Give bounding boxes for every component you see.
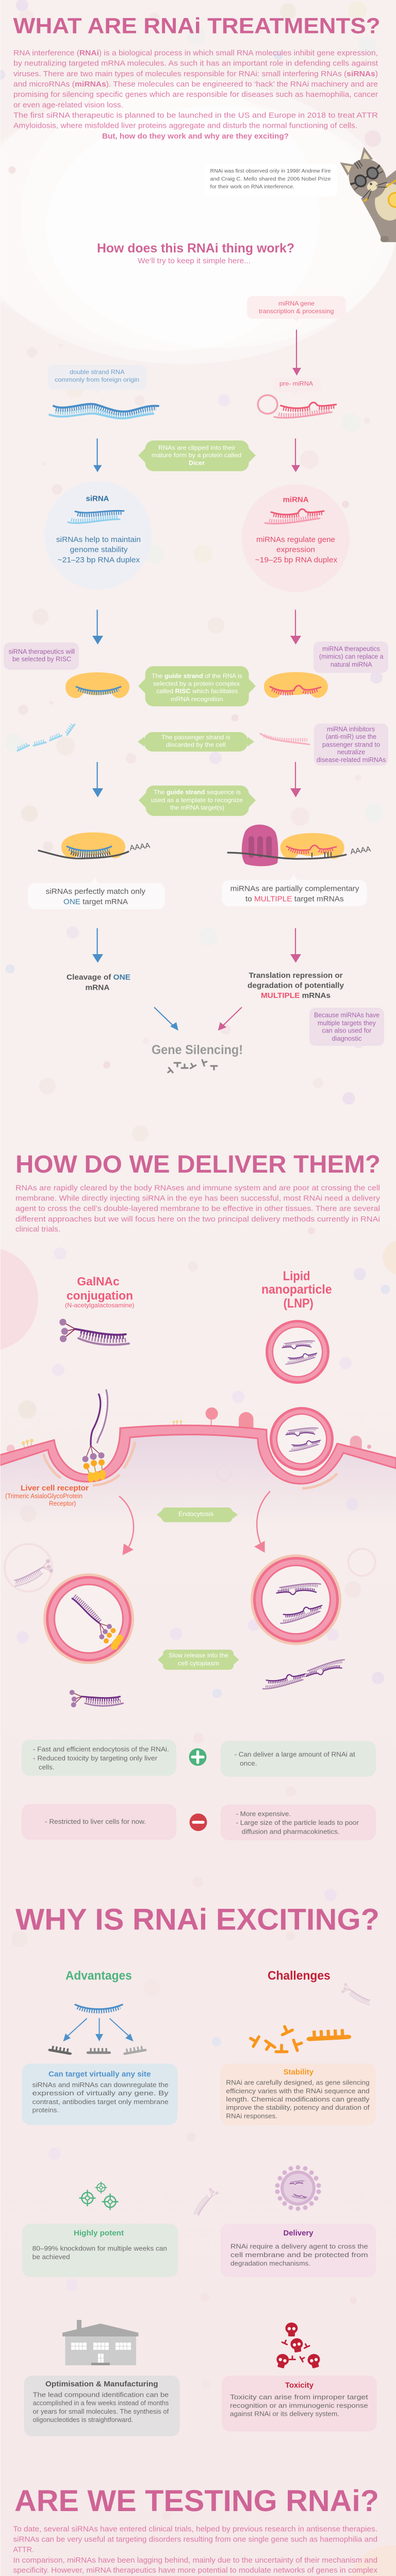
callout: first observed: for their work on RNA interference. [210,184,294,190]
panel: miRNA: ~19–25 bp RNA duplex [255,555,338,564]
panel: LNP cons [221,1804,376,1840]
callout: first observed [205,164,337,197]
bubble: miRNA gene: miRNA gene [278,300,315,307]
heading: lipid nanoparticle [261,1269,332,1311]
icon: delivery particle [275,2165,321,2211]
icon: released GalNAc siRNA [70,1690,123,1707]
text: cleavage of one mRNA [67,974,130,992]
heading: lipid nanoparticle: Lipid [283,1269,310,1283]
panel: can target any site: expression of virtually any gene. By [32,2090,169,2097]
callout: slow release: cell cytoplasm [178,1660,219,1667]
bubble: miRNA gene: transcription & processing [259,308,334,315]
intro paragraph: by neutralizing targeted mRNA molecules. As such it has an important role in defending cells against [13,59,378,68]
delivery paragraph: agent to cross the cell’s double-layered membrane to be effective in other tissues. There are several [15,1205,380,1213]
bubble: miRNAs match MULTIPLE [222,875,367,906]
note: miRNA diagnostics [309,1008,384,1046]
delivery paragraph: clinical trials. [15,1225,60,1234]
panel: miRNA: expression [276,545,315,554]
callout: passenger strand: The passenger strand is [161,734,230,741]
panel: delivery: RNAi require a delivery agent to cross the [230,2243,368,2250]
arrow: gene to pre-miRNA [292,330,301,376]
bubble: pre-miRNA [273,378,321,396]
heading: advantages: Advantages [65,1969,132,1983]
arrow: miRNA clip [291,438,300,472]
title: what are RNAi treatments: WHAT ARE RNAi TREATMENTS? [13,13,381,38]
heading: lipid nanoparticle: nanoparticle [261,1282,332,1297]
panel: GalNAc pros [22,1740,176,1776]
note: miRNA diagnostics: diagnostic [332,1035,361,1042]
decorative faded strand [340,1982,373,2007]
panel: can target any site: Can target virtually any site [48,2070,151,2078]
icon: factory [62,2320,138,2365]
icon: GalNAc siRNA [57,1318,131,1349]
heading: how does this work: How does this RNAi thing work? [97,241,294,256]
panel: delivery: degradation mechanisms. [230,2260,310,2267]
arrow: GalNAc endocytosis [119,1496,134,1555]
label: liver cell receptor [5,1484,89,1507]
heading: GalNAc conjugation: GalNAc [77,1275,120,1288]
callout: guide strand template: used as a template to recognize [151,796,243,804]
panel: optimisation and manufacturing: oligonucleotides is straightforward. [33,2416,133,2424]
arrow: siRNA to RISC [92,610,103,645]
panel: LNP pros: - Can deliver a large amount of RNAi at [234,1751,355,1758]
icon: released LNP RNAs [261,1659,346,1689]
decorative big cells [0,1238,396,1351]
text: translation repression: degradation of potentially [248,982,344,990]
panel: can target any site: proteins. [32,2107,59,2114]
bubble: miRNAs match MULTIPLE: miRNAs are partially complementary [230,884,359,893]
callout: Dicer: Dicer [189,459,205,466]
panel: siRNA: siRNAs help to maintain [56,535,141,544]
panel: GalNAc cons: - Restricted to liver cells for now. [45,1818,146,1825]
bubble: double strand RNA: double strand RNA [70,368,125,376]
title: how do we deliver them: HOW DO WE DELIVER THEM? [15,1151,381,1178]
panel: toxicity: against RNAi or its delivery system. [230,2410,339,2417]
panel: stability [221,2064,376,2125]
panel: optimisation and manufacturing: The lead compound identification can be [33,2391,169,2398]
panel: LNP pros [221,1741,376,1777]
panel: highly potent: Highly potent [74,2229,124,2238]
callout: guide strand RISC: mRNA recognition [171,696,223,703]
callout: Dicer [138,440,256,471]
arrow: LNP endocytosis [254,1491,270,1553]
label: liver cell receptor: Receptor) [49,1500,76,1507]
note: miRNA therapeutics: (mimics) can replace a [319,653,384,660]
intro paragraph: The first siRNA therapeutic is planned to be launched in the US and Europe in 2018 to treat ATTR [13,111,378,120]
cell interior shading [0,1434,396,1525]
title: are we testing RNAi: ARE WE TESTING RNAi? [14,2484,379,2518]
note: siRNA therapeutics: be selected by RISC [12,655,71,663]
icon: RISC with miRNA guide [264,672,328,698]
panel: GalNAc pros: cells. [39,1764,54,1771]
decorative orange blobs [0,2545,396,2576]
panel: stability: efficiency varies with the RNAi sequence and [226,2088,370,2095]
text: translation repression [248,972,344,1000]
arrow: siRNA clip [93,438,102,472]
panel: stability: RNAi responses. [226,2112,277,2120]
heading: how does this work [97,241,294,265]
panel: siRNA: ~21–23 bp RNA duplex [58,555,140,564]
callout: guide strand RISC [138,666,256,706]
arrow: pink to gene silencing [218,1007,242,1030]
testing paragraph: In comparison, miRNAs have been lagging behind, mainly due to the uncertainty of their mechanism and [13,2556,377,2565]
bubble: siRNAs match ONE: siRNAs perfectly match only [46,887,146,896]
panel: LNP cons: diffusion and pharmacokinetics. [242,1828,340,1835]
callout: guide strand template [139,786,256,816]
icon: minus [190,1814,207,1831]
panel: toxicity: recognition or an immunogenic response [230,2402,368,2409]
callout: first observed: and Craig C. Mello shared the 2006 Nobel Prize [210,176,331,182]
bubble: siRNAs match ONE: ONE target mRNA [63,897,128,906]
label: liver cell receptor: Liver cell receptor [21,1484,89,1493]
callout: Dicer: RNAs are clipped into their [158,444,236,451]
delivery paragraph: different approaches but we will focus here on the two principal delivery methods currently in RNAi [15,1215,380,1224]
note: miRNA inhibitors: passenger strand to [322,741,380,749]
icon: cat with Nobel medal [337,145,396,242]
icon: long double strand RNA [50,404,158,418]
icon: miRNA bound to target mRNA with ribosome: AAAA [350,845,371,856]
callout: guide strand RISC: The guide strand of the RNA is [152,672,242,680]
note: siRNA therapeutics: siRNA therapeutics will [9,648,75,655]
arrow: siRNA to target [92,762,103,798]
testing paragraph: siRNAs can be very useful at targeting disorders resulting from one single gene such as haemophilia and [13,2535,377,2544]
delivery paragraph: membrane. While directly injecting siRNA in the eye has been successful, most RNAi need a delivery [15,1194,381,1202]
panel: LNP pros: once. [240,1760,257,1767]
note: miRNA inhibitors: disease-related miRNAs [317,756,386,764]
callout: guide strand template: the mRNA target(s) [170,804,224,811]
heading: challenges: Challenges [268,1969,331,1983]
bubble: miRNAs match MULTIPLE: to MULTIPLE target mRNAs [245,894,344,903]
panel: delivery: cell membrane and be protected from [230,2251,368,2259]
icon: miRNA bound to target mRNA with ribosome [228,824,371,866]
panel: LNP cons: - Large size of the particle leads to poor [236,1819,359,1826]
icon: endosome with LNP RNAs [251,1554,341,1645]
panel: stability: Stability [284,2067,314,2076]
text: translation repression: Translation repression or [249,972,343,980]
note: miRNA diagnostics: Because miRNAs have [314,1012,380,1019]
heading: lipid nanoparticle: (LNP) [284,1296,314,1311]
bubble: pre-miRNA: pre- miRNA [279,380,313,387]
note: miRNA inhibitors: (anti-miR) use the [326,733,376,740]
text: cleavage of one mRNA: mRNA [86,984,110,992]
arrow: to translation repression [290,928,301,963]
panel: delivery: Delivery [284,2229,314,2238]
note: miRNA therapeutics: natural miRNA [331,661,372,668]
icon: skulls [275,2323,322,2369]
note: miRNA therapeutics: miRNA therapeutics [322,646,380,653]
panel: highly potent: 80–99% knockdown for multiple weeks can [32,2245,167,2252]
panel: can target any site [22,2064,177,2125]
bubble: double strand RNA [48,365,147,394]
note: siRNA therapeutics [4,642,79,670]
heading: GalNAc conjugation: conjugation [67,1289,133,1302]
panel: optimisation and manufacturing: Optimisation & Manufacturing [45,2380,158,2388]
testing paragraph [13,2524,377,2576]
callout: endocytosis [157,1507,238,1522]
icon: target crosshairs [79,2181,119,2210]
panel: toxicity: Toxicity can arise from improper target [230,2394,368,2401]
panel: stability: improve the stability, potency and duration of [226,2104,370,2111]
panel: optimisation and manufacturing [24,2376,180,2436]
callout: passenger strand: discarded by the cell [166,741,225,749]
arrow: miRNA to RISC [290,610,301,645]
icon: orange degraded strand [248,2024,348,2053]
icon: RISC with siRNA guide [65,672,129,698]
callout: passenger strand [138,732,254,752]
panel: GalNAc pros: - Fast and efficient endocytosis of the RNAi. [33,1746,169,1753]
note: miRNA diagnostics: can also used for [322,1027,371,1035]
intro paragraph [13,48,378,141]
icon: degraded passenger strand siRNA [17,723,74,751]
left edge strip [0,0,1,2576]
icon: endosome with GalNAc siRNA [43,1573,134,1664]
delivery paragraph: RNAs are rapidly cleared by the body RNAses and immune system and are poor at crossing the cell [15,1183,380,1192]
panel: toxicity: Toxicity [285,2381,314,2390]
arrow: to cleavage [92,928,103,963]
bubble: miRNA gene [247,296,346,321]
panel: siRNA: genome stability [70,545,128,554]
icon: siRNA bound to target mRNA: AAAA [129,841,151,853]
bubble: siRNAs match ONE [28,878,165,909]
heading: GalNAc conjugation: (N-acetylgalactosamine) [65,1302,135,1309]
panel: can target any site: siRNAs and miRNAs can downregulate the [32,2081,169,2089]
intro paragraph: RNA interference ( RNAi) is a biological process in which small RNA molecules inhibit gene expression, [13,48,378,58]
label: liver cell receptor: (Trimeric AsialoGlycoProtein [5,1493,82,1500]
callout: Dicer: mature form by a protein called [152,452,241,459]
icon: passenger strand miRNA [260,734,309,744]
testing paragraph: ATTR. [13,2545,34,2554]
icon: mRNA fragments [166,1059,217,1075]
intro paragraph: Amyloidosis, where misfolded liver proteins aggregate and disturb the normal functioning of cells. [13,122,357,130]
panel: miRNA: miRNA [283,495,309,504]
text: cleavage of one mRNA: Cleavage of ONE [67,974,130,982]
arrow: blue to gene silencing [154,1007,178,1030]
intro paragraph: or even age-related vision loss. [13,100,123,109]
panel: delivery [221,2224,376,2277]
arrow: miRNA to target [290,762,301,798]
panel: stability: RNAi are carefully designed, as gene silencing [226,2079,370,2087]
icon: plus [189,1748,206,1766]
panel: can target any site: contrast, antibodies target only membrane [32,2098,169,2106]
icon: lipid nanoparticle [266,1320,329,1384]
testing paragraph: specificity. However, miRNA therapeutics have more potential to modulate networks of genes in complex [13,2566,377,2575]
panel: GalNAc cons [22,1804,176,1840]
panel: highly potent [22,2224,178,2277]
panel: GalNAc pros: - Reduced toxicity by targeting only liver [33,1755,157,1762]
panel: LNP cons: - More expensive. [236,1810,291,1818]
heading: how does this work: We‘ll try to keep it simple here... [138,257,251,265]
panel: highly potent: be achieved [32,2253,70,2261]
panel: stability: length. Chemical modifications can greatly [226,2096,370,2103]
decorative white cell blob [0,79,396,364]
icon: siRNA bound to target mRNA [39,833,151,858]
intro paragraph: But, how do they work and why are they exciting? [102,132,289,141]
icon: cell membrane with receptors [0,1408,396,1488]
delivery paragraph [15,1183,381,1234]
panel: miRNA: miRNAs regulate gene [256,535,335,544]
testing paragraph: To date, several siRNAs have entered clinical trials, helped by previous research in antisense therapies. [13,2524,377,2533]
intro paragraph: and microRNAs ( miRNAs). These molecules can be engineered to ‘hack’ the RNAi machinery and are [13,80,378,89]
callout: guide strand template: The guide strand sequence is [154,789,241,796]
panel: optimisation and manufacturing: or years for small molecules. The synthesis of [33,2408,169,2415]
text: translation repression: MULTIPLE mRNAs [261,992,331,1000]
panel: siRNA [44,481,152,589]
note: miRNA therapeutics [314,641,388,673]
callout: guide strand RISC: called RISC which facilitates [156,688,238,695]
bubble: double strand RNA: commonly from foreign origin [55,376,139,383]
panel: siRNA: siRNA [86,495,109,503]
intro paragraph: promising for silencing specific genes which are responsible for diseases such as haemophilia, cancer [13,90,378,99]
text: gene silencing: Gene Silencing! [152,1043,243,1057]
icon: GalNAc binding to liver receptor [82,1390,108,1483]
panel: miRNA [242,484,350,592]
title: why is RNAi exciting: WHY IS RNAi EXCITING? [15,1903,380,1937]
icon: LNP entering the membrane [270,1407,334,1471]
callout: endocytosis: Endocytosis [178,1511,213,1518]
note: miRNA inhibitors [314,723,388,766]
panel: toxicity [222,2376,377,2432]
callout: slow release: Slow release into the [169,1652,228,1659]
icon: pre-miRNA hairpin [258,395,336,418]
note: miRNA diagnostics: multiple targets they [318,1020,376,1027]
intro paragraph: viruses. There are two main types of molecules responsible for RNAi: small interfering RNAs ( siRNAs) [13,70,378,78]
callout: first observed: RNAi was first observed only in 1998! Andrew Fire [210,168,331,174]
heading: GalNAc conjugation [65,1275,135,1309]
decorative faded strand [192,2187,219,2219]
callout: guide strand RISC: selected by a protein complex [153,680,240,687]
note: miRNA inhibitors: miRNA inhibitors [327,725,375,733]
note: miRNA inhibitors: neutralize [337,749,365,756]
decorative faded vesicles [5,1544,375,1591]
icon: guide strand targeting any gene [50,2005,145,2054]
callout: slow release [158,1650,239,1670]
panel: optimisation and manufacturing: accomplished in a few weeks instead of months [33,2400,169,2407]
